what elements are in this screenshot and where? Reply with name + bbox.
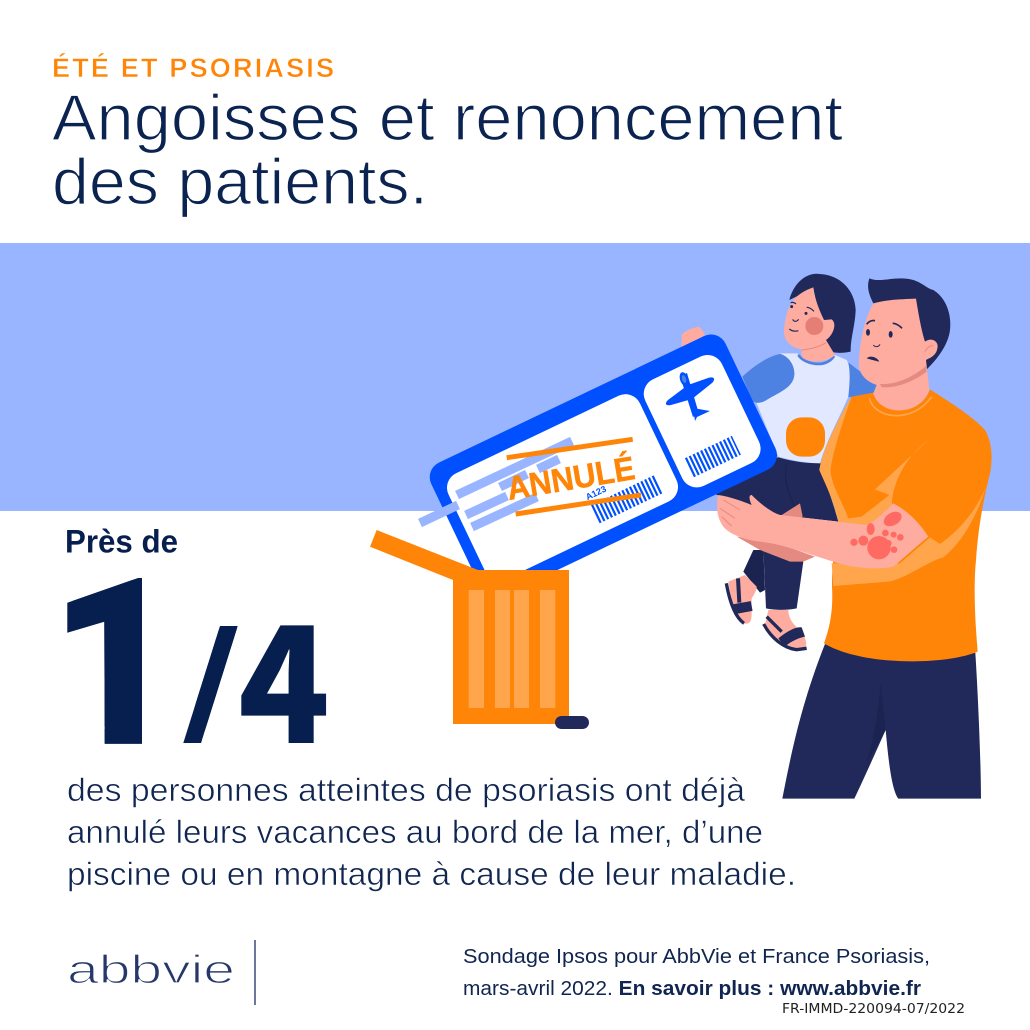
man arm holding child — [717, 495, 928, 568]
child — [713, 274, 881, 522]
plane ticket — [420, 329, 782, 603]
source: Sondage Ipsos pour AbbVie et France Psoriasis, — [463, 946, 930, 968]
title: Angoisses et renoncement — [52, 81, 843, 154]
man head — [859, 278, 950, 410]
description: des personnes atteintes de psoriasis ont déjà — [67, 772, 745, 808]
description: piscine ou en montagne à cause de leur maladie. — [67, 856, 796, 892]
barcode main — [595, 484, 659, 514]
trash bin — [370, 530, 589, 729]
child legs and sandals — [726, 550, 807, 650]
child hand — [682, 327, 705, 348]
source: mars-avril 2022. En savoir plus : www.abbvie.fr — [463, 978, 921, 1000]
number one quarter — [67, 578, 326, 744]
number one quarter: 4 — [238, 555, 330, 790]
title — [52, 81, 843, 218]
psoriasis patches — [850, 509, 904, 559]
strike-through bars — [420, 441, 572, 527]
statistic — [67, 528, 326, 744]
reference code: FR-IMMD-220094-07/2022 — [782, 1002, 965, 1017]
lead-in: Près de — [65, 524, 178, 560]
heading block — [52, 52, 843, 218]
number one quarter: / — [183, 601, 240, 777]
illustration: man and child — [682, 274, 992, 799]
description — [67, 772, 796, 892]
cancelled stamp: ANNULÉ — [504, 449, 637, 507]
plane icon — [666, 371, 714, 421]
man shirt — [819, 389, 992, 661]
source — [463, 946, 930, 1000]
description: annulé leurs vacances au bord de la mer, d’une — [67, 814, 763, 850]
AbbVie logo: abbvie — [67, 948, 235, 992]
flight number: A123 — [584, 484, 608, 502]
title: des patients. — [52, 145, 428, 218]
barcode stub — [689, 445, 736, 468]
number one quarter: 1 — [50, 483, 188, 810]
kicker: ÉTÉ ET PSORIASIS — [52, 52, 334, 83]
blue band — [0, 243, 1030, 511]
man trousers — [782, 644, 981, 799]
